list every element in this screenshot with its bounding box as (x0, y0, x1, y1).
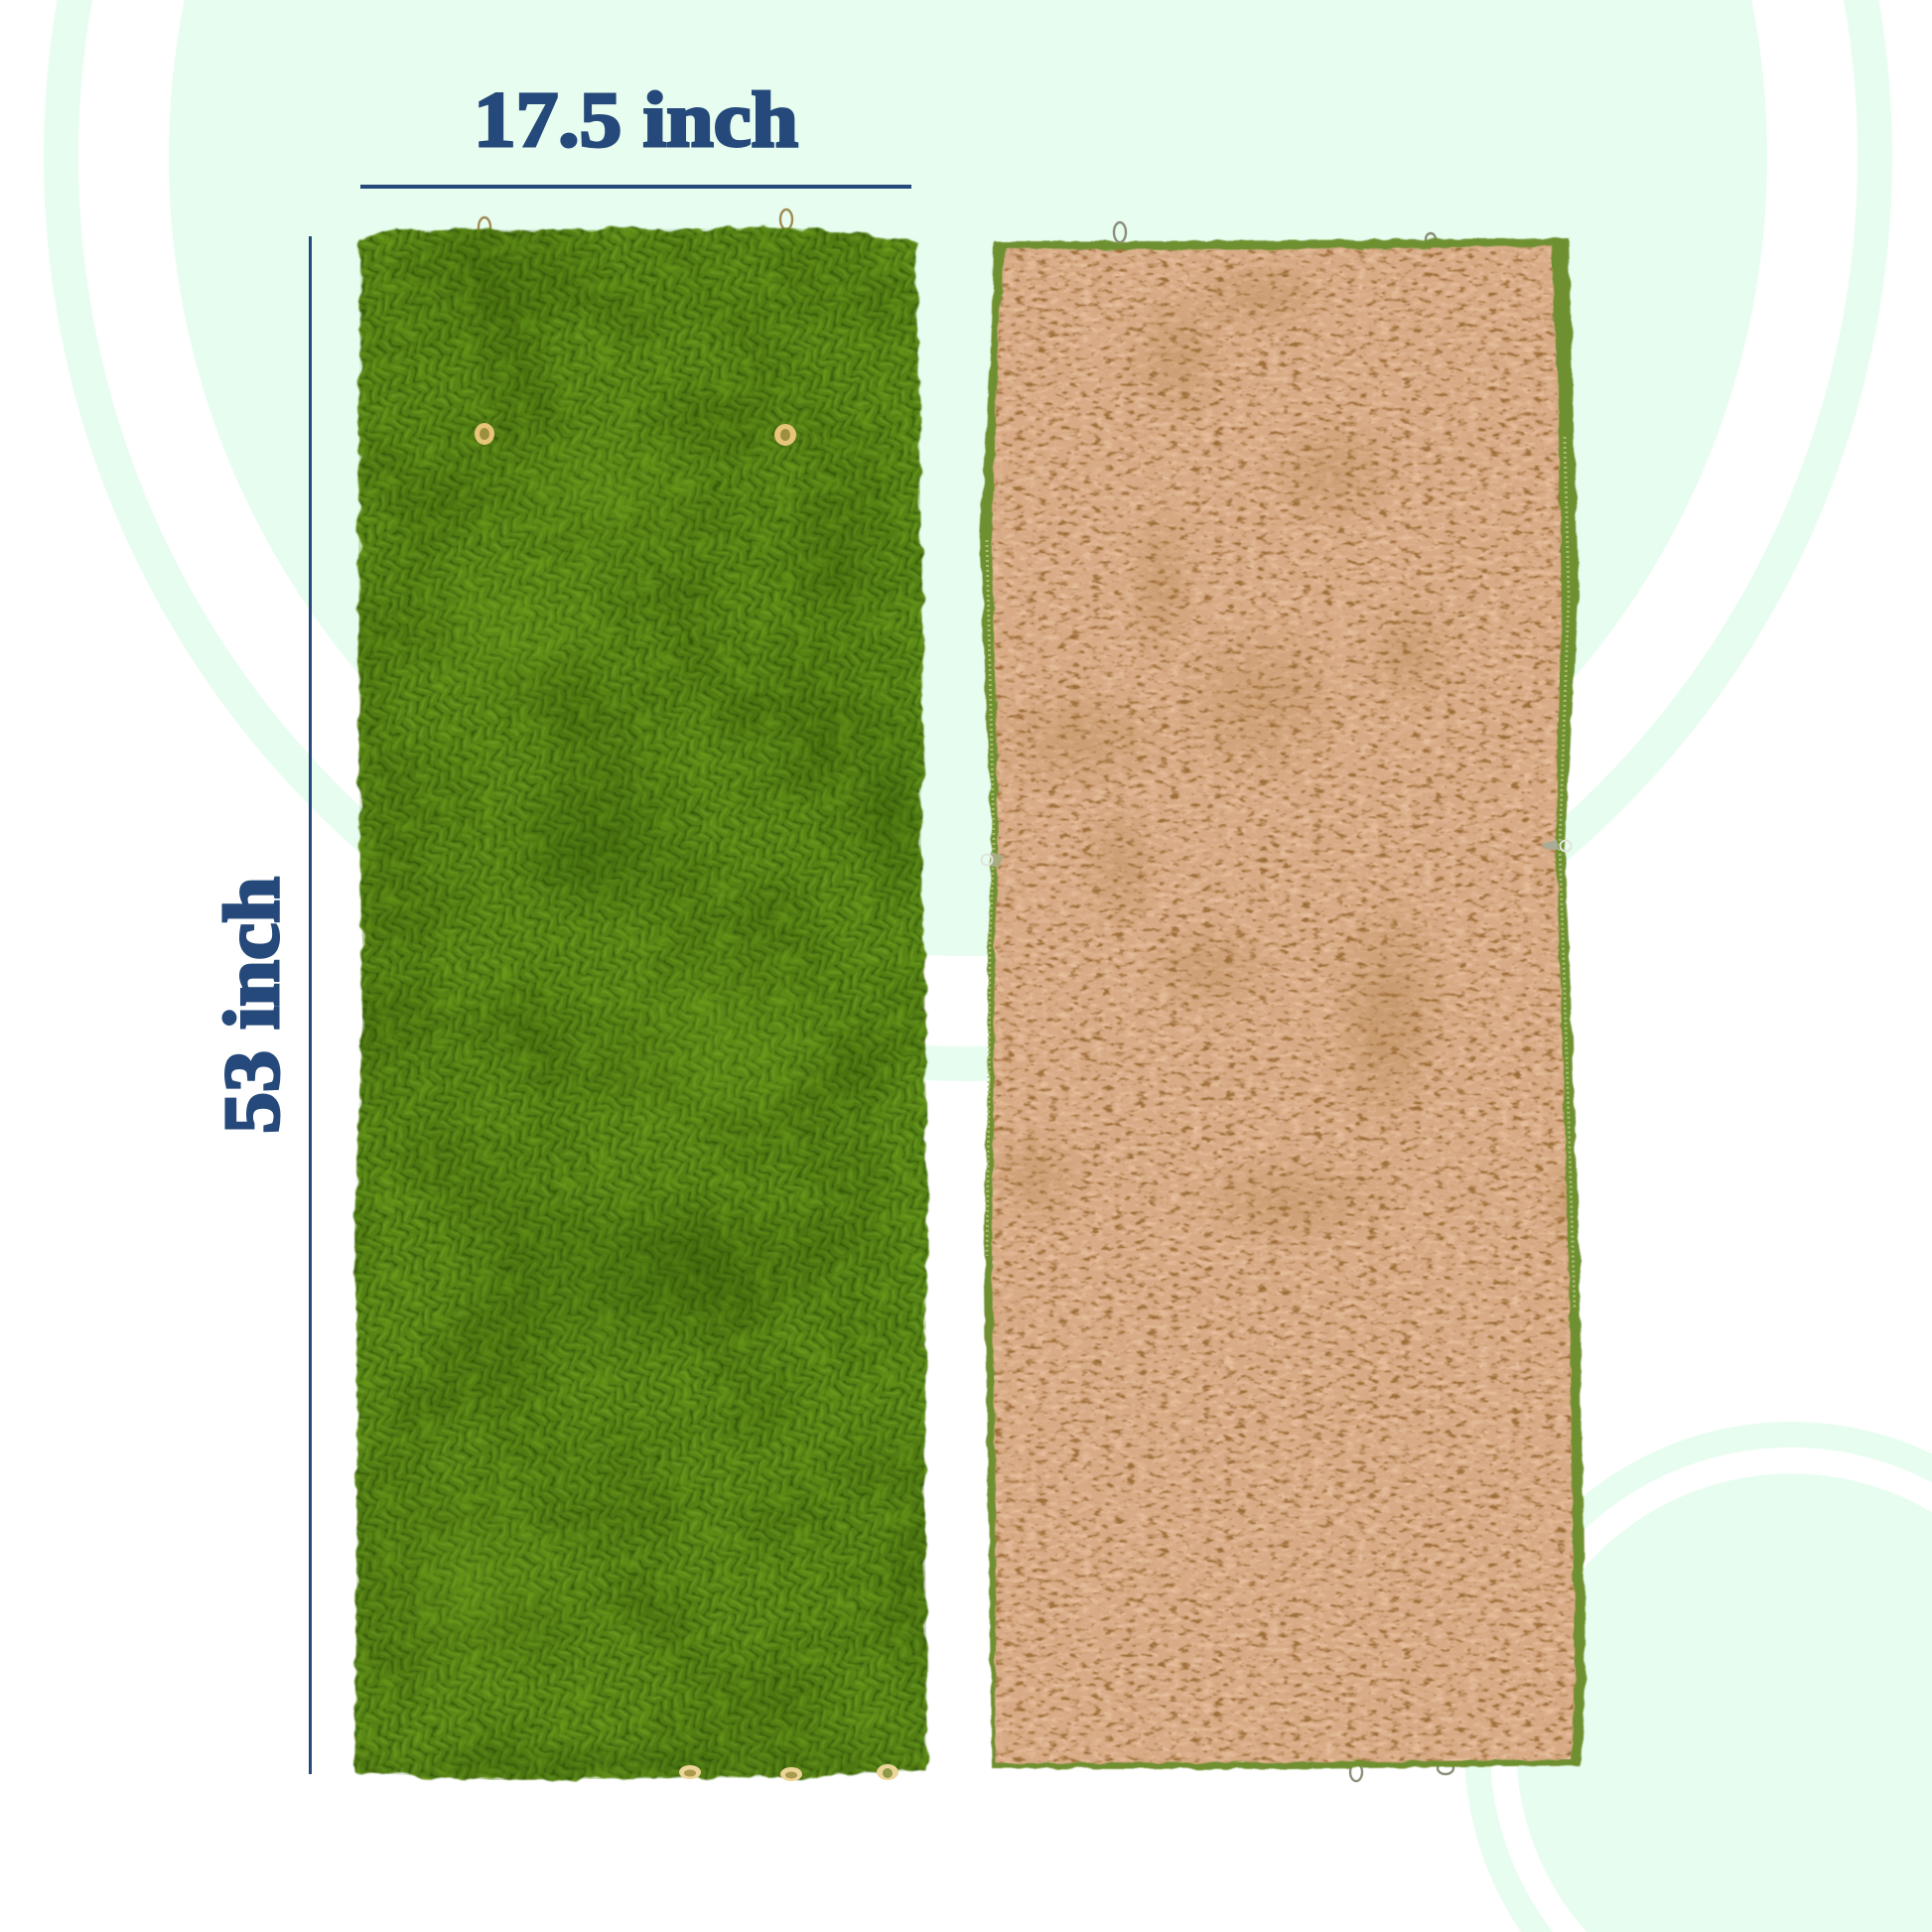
panel: green knitted mat front (338, 209, 933, 1787)
wooden buttons along bottom edge (679, 1764, 898, 1781)
loop hooks on top edge of green mat (479, 209, 792, 237)
zipper edge stitching (987, 437, 1575, 1309)
panel: beige fleece mat back (979, 222, 1588, 1781)
zipper pull right (1542, 840, 1571, 852)
width dimension line (360, 185, 911, 189)
height dimension line (309, 236, 312, 1774)
loop hooks on beige mat edges (1114, 222, 1453, 1781)
background circle: large ring (62, 0, 1874, 1064)
wooden button upper right (774, 424, 796, 446)
background circle: small ring (1464, 1422, 1932, 1932)
width label: 17.5 inch (474, 77, 798, 164)
zipper pull left (981, 852, 1004, 868)
green mat body with twill weave (354, 227, 927, 1780)
green border of beige mat (980, 238, 1586, 1769)
wooden button upper left (475, 423, 494, 445)
fleece texture and dark patches (979, 238, 1588, 1772)
background circle: small disc (1516, 1473, 1932, 1932)
beige fleece surface (992, 246, 1575, 1763)
background circle: large disc (169, 0, 1767, 956)
green mat light and shadow variation (338, 223, 933, 1787)
height label: 53 inch (209, 877, 296, 1134)
